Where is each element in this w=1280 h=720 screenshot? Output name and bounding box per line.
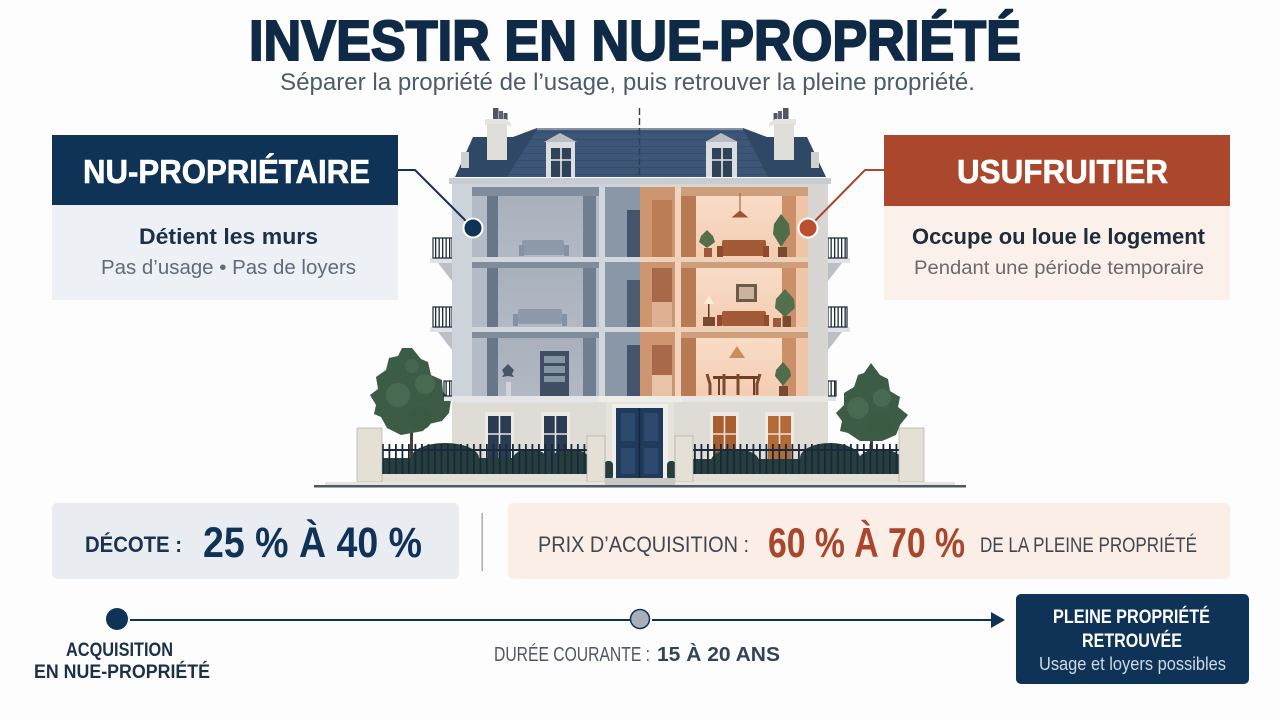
tree: right [836, 363, 908, 475]
timeline [34, 608, 1005, 683]
label: de la pleine propriété: DE LA PLEINE PROPRIÉTÉ [980, 534, 1197, 557]
split line [638, 108, 640, 178]
marker: durée [630, 610, 650, 628]
label: durée courante [494, 643, 780, 666]
furniture: sofas, plants, lamp, dining table [699, 193, 795, 396]
wing: usufruit, warm furnished floors [640, 184, 828, 402]
marker: acquisition [106, 608, 128, 630]
value: 60 % à 70 %: 60 % À 70 % [768, 519, 965, 566]
windows: right [710, 412, 794, 472]
arrowhead [991, 612, 1005, 628]
label: durée courante: DURÉE COURANTE : [494, 643, 650, 666]
text: détient les murs: Détient les murs [139, 224, 318, 249]
windows: left [485, 412, 570, 472]
label: prix d'acquisition: PRIX D’ACQUISITION : [538, 532, 749, 557]
balconies [430, 238, 850, 401]
dormer: left [544, 133, 577, 177]
callout: pleine propriété retrouvée: PLEINE PROPRIÉTÉ [1053, 606, 1210, 628]
ground floor [452, 396, 828, 482]
panel: nu-propriétaire [52, 135, 398, 300]
text: occupe ou loue: Occupe ou loue le logement [912, 224, 1206, 249]
ground [314, 478, 966, 488]
label: acquisition [34, 640, 210, 683]
divider [482, 513, 483, 571]
building illustration [314, 108, 966, 488]
cornice [449, 178, 831, 184]
label: acquisition: EN NUE-PROPRIÉTÉ [34, 661, 210, 683]
chimney: right [769, 108, 796, 160]
title: INVESTIR EN NUE-PROPRIÉTÉ [249, 9, 1021, 73]
connector: usufruitier [798, 170, 884, 238]
hedges [380, 443, 902, 480]
dormer: right [705, 133, 738, 177]
callout: pleine propriété retrouvée: RETROUVÉE [1082, 630, 1182, 652]
label: durée courante: 15 À 20 ANS [657, 643, 780, 666]
chimney: left [485, 108, 511, 160]
connector: nu-propriétaire [398, 170, 482, 238]
furniture: sofas and bookcase, ghosted [502, 240, 569, 396]
fence [357, 428, 924, 482]
label: décote: DÉCOTE : [85, 532, 182, 557]
label: acquisition: ACQUISITION [66, 640, 173, 661]
text: pas d'usage: Pas d’usage • Pas de loyers [101, 257, 356, 279]
callout: pleine propriété retrouvée: Usage et loyers possibles [1039, 654, 1226, 674]
wing: nue-propriété, grey-blue floors [452, 184, 640, 402]
stat: prix d'acquisition [508, 503, 1230, 579]
heading: usufruitier: USUFRUITIER [957, 154, 1168, 191]
value: 25 % à 40 %: 25 % À 40 % [203, 519, 422, 567]
text: période temporaire: Pendant une période temporaire [914, 258, 1204, 279]
tree: left [370, 348, 451, 475]
panel: usufruitier [884, 135, 1230, 300]
callout: pleine propriété retrouvée [1016, 594, 1249, 684]
stat: décote [52, 503, 459, 579]
roof [455, 128, 826, 177]
door [612, 404, 668, 480]
heading: nu-propriétaire: NU-PROPRIÉTAIRE [83, 153, 370, 191]
subtitle: Séparer la propriété de l’usage, puis retrouver la pleine propriété. [280, 69, 975, 96]
